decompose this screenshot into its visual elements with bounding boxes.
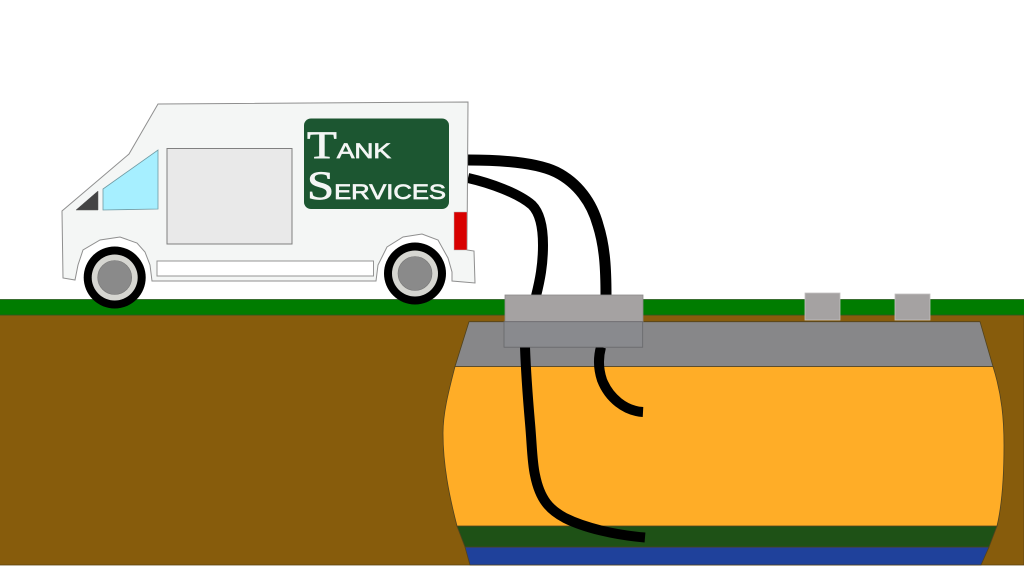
tank layer: sludge bbox=[457, 526, 997, 547]
tank layer: vapour space bbox=[455, 322, 993, 366]
hoses inside tank bbox=[525, 347, 645, 538]
van bbox=[62, 102, 475, 308]
hoses from van to manhole bbox=[468, 160, 606, 296]
tank layer: water bbox=[465, 547, 989, 565]
rear wheel bbox=[384, 242, 446, 304]
grass strip bbox=[0, 300, 1024, 315]
van headlight bbox=[76, 191, 98, 210]
van sign bbox=[304, 118, 449, 209]
sign background bbox=[304, 118, 449, 209]
vent cap 1 bbox=[805, 293, 840, 320]
ground soil bbox=[0, 315, 1024, 565]
underground tank bbox=[443, 322, 1004, 565]
sign text: Services: SERVICES bbox=[307, 163, 446, 208]
hose: short return line bbox=[599, 347, 643, 412]
van windscreen bbox=[103, 150, 158, 210]
vent cap 2 bbox=[895, 294, 930, 320]
van tail light bbox=[454, 212, 467, 250]
hose: long suction line bbox=[525, 347, 645, 538]
manhole upper section bbox=[505, 295, 643, 322]
van side panel bbox=[167, 148, 292, 244]
hose: upper van line bbox=[468, 160, 606, 296]
front wheel bbox=[84, 246, 146, 308]
tank layer: fuel bbox=[443, 366, 1004, 526]
manhole lower section bbox=[504, 322, 643, 347]
van side step bbox=[157, 261, 374, 276]
van body bbox=[62, 102, 475, 283]
sign text: Tank: T ANK bbox=[307, 124, 391, 167]
manhole access box bbox=[504, 295, 643, 347]
hose: lower van line bbox=[468, 178, 543, 296]
